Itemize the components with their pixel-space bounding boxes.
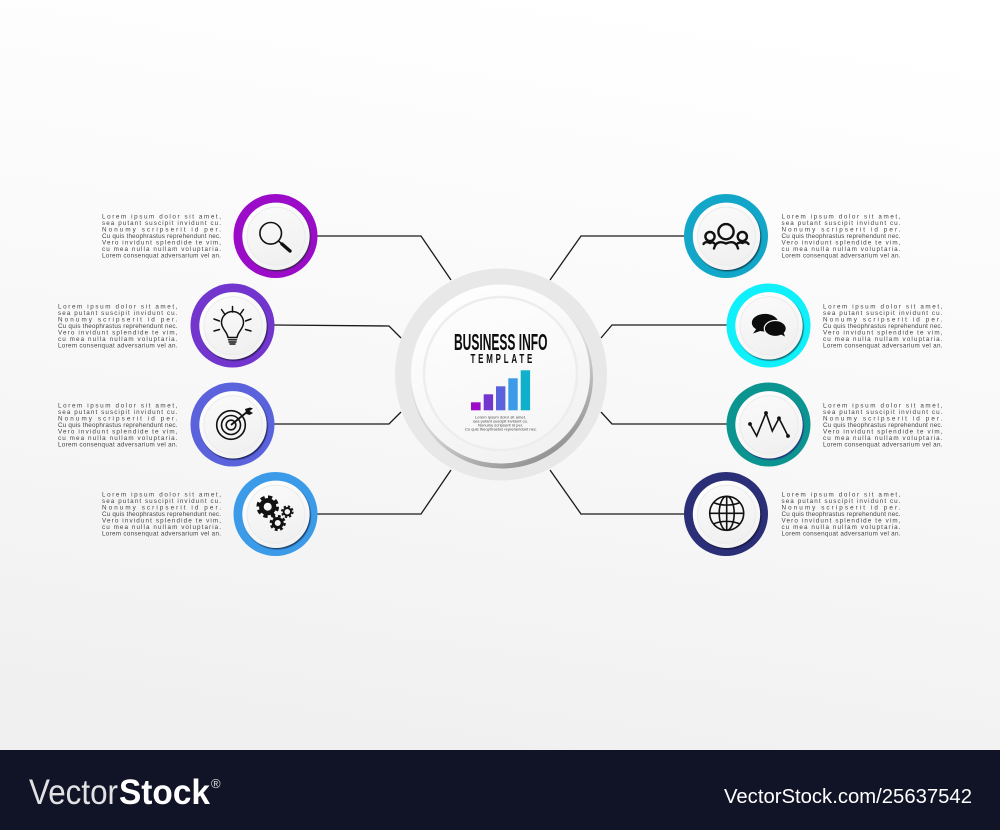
text block: left 2: Vero invidunt splendide te vim,: [58, 330, 178, 336]
node: idea: [190, 284, 274, 368]
text block: right 1: Cu quis theophrastus reprehendunt nec.: [782, 233, 901, 240]
hub title: TEMPLATE: [470, 352, 535, 367]
hub caption: [465, 415, 537, 432]
hub title: BUSINESS INFO: [454, 329, 548, 355]
text block: left 3: Cu quis theophrastus reprehendunt nec.: [58, 422, 178, 429]
footer logo: ®: [211, 776, 221, 791]
text block: right 2: Cu quis theophrastus reprehendunt nec.: [823, 323, 943, 330]
text block: right 3: Lorem consenquat adversarium vel an.: [823, 442, 943, 448]
hub caption: Nonumy scripserit id per.: [478, 422, 523, 427]
hub caption: sea putant suscipit invidunt cu.: [473, 419, 528, 424]
text block: left 1: [102, 214, 221, 260]
node: settings: [234, 472, 318, 556]
text block: left 1: Lorem consenquat adversarium vel an.: [102, 252, 221, 260]
text block: right 1: Lorem consenquat adversarium vel an.: [782, 252, 901, 260]
text block: left 3: [58, 402, 178, 448]
text block: left 4: Lorem ipsum dolor sit amet,: [102, 492, 221, 498]
text block: left 4: Cu quis theophrastus reprehendunt nec.: [102, 511, 221, 518]
text block: left 4: Vero invidunt splendide te vim,: [102, 518, 221, 524]
footer bar: [0, 750, 1000, 830]
text block: right 4: Lorem ipsum dolor sit amet,: [782, 492, 901, 498]
text block: right 3: Cu quis theophrastus reprehendunt nec.: [823, 422, 943, 429]
text block: right 3: Vero invidunt splendide te vim,: [823, 428, 943, 436]
text block: left 2: Cu quis theophrastus reprehendunt nec.: [58, 323, 178, 330]
text block: right 3: sea putant suscipit invidunt cu.: [823, 409, 943, 416]
node: search: [234, 194, 318, 278]
text block: right 2: Lorem ipsum dolor sit amet,: [823, 304, 943, 310]
text block: left 3: cu mea nulla nullam voluptaria.: [58, 435, 178, 442]
text block: left 2: cu mea nulla nullam voluptaria.: [58, 336, 178, 343]
text block: right 3: [823, 402, 943, 448]
text block: left 3: Lorem consenquat adversarium vel an.: [58, 442, 178, 448]
footer logo: Vector: [29, 773, 118, 812]
text block: left 2: [58, 304, 178, 350]
icon: magnifying glass: [260, 222, 290, 251]
text block: right 2: Nonumy scripserit id per.: [823, 316, 943, 324]
text block: left 1: cu mea nulla nullam voluptaria.: [102, 246, 221, 253]
text block: left 2: Lorem consenquat adversarium vel an.: [58, 342, 178, 350]
footer image id: VectorStock.com/25637542: [724, 786, 972, 808]
text block: right 4: sea putant suscipit invidunt cu.: [782, 498, 901, 505]
node: team: [684, 194, 768, 278]
footer logo: Stock: [119, 773, 211, 812]
text block: right 1: [782, 214, 901, 260]
text block: left 1: Cu quis theophrastus reprehendunt nec.: [102, 233, 221, 240]
text block: left 3: Vero invidunt splendide te vim,: [58, 428, 178, 436]
text block: left 3: Nonumy scripserit id per.: [58, 416, 178, 422]
text block: right 4: Vero invidunt splendide te vim,: [782, 518, 901, 524]
text block: left 1: Nonumy scripserit id per.: [102, 226, 221, 234]
text block: left 3: Lorem ipsum dolor sit amet,: [58, 402, 178, 410]
hub title: [454, 329, 548, 367]
icon: gears: [258, 497, 293, 530]
text block: right 4: cu mea nulla nullam voluptaria.: [782, 524, 901, 531]
node: globe: [684, 472, 768, 556]
text block: right 4: Lorem consenquat adversarium vel an.: [782, 530, 901, 538]
text block: left 1: Vero invidunt splendide te vim,: [102, 240, 221, 246]
footer logo: [29, 773, 221, 812]
text block: left 2: Nonumy scripserit id per.: [58, 316, 178, 324]
text block: left 2: Lorem ipsum dolor sit amet,: [58, 304, 178, 310]
text block: left 1: sea putant suscipit invidunt cu.: [102, 220, 221, 227]
text block: left 3: sea putant suscipit invidunt cu.: [58, 409, 178, 416]
icon: target with arrow: [217, 408, 253, 439]
text block: right 1: Nonumy scripserit id per.: [782, 226, 901, 234]
text block: left 4: [102, 492, 221, 538]
text block: left 2: sea putant suscipit invidunt cu.: [58, 310, 178, 317]
icon: zigzag line chart: [748, 411, 790, 438]
text block: left 4: cu mea nulla nullam voluptaria.: [102, 524, 221, 531]
text block: left 4: Lorem consenquat adversarium vel an.: [102, 530, 221, 538]
text block: right 2: sea putant suscipit invidunt cu.: [823, 310, 943, 317]
icon: people: [704, 224, 748, 248]
connector lines: [274, 236, 727, 514]
node: trend: [726, 382, 810, 466]
node: target: [190, 382, 274, 466]
text block: right 2: [823, 304, 943, 350]
text block: right 4: Cu quis theophrastus reprehendunt nec.: [782, 511, 901, 518]
text block: right 4: Nonumy scripserit id per.: [782, 504, 901, 512]
text block: right 2: cu mea nulla nullam voluptaria.: [823, 336, 943, 343]
icon: speech bubbles: [752, 314, 786, 336]
text block: right 2: Lorem consenquat adversarium vel an.: [823, 342, 943, 350]
text block: left 4: Nonumy scripserit id per.: [102, 504, 221, 512]
icon: light bulb: [214, 306, 251, 344]
text block: right 1: cu mea nulla nullam voluptaria.: [782, 246, 901, 253]
hub bar chart: [471, 370, 530, 410]
text block: right 3: Nonumy scripserit id per.: [823, 416, 943, 422]
text block: right 1: Vero invidunt splendide te vim,: [782, 240, 901, 246]
hub caption: Cu quis theophrastus reprehendunt nec.: [465, 427, 537, 432]
text block: right 1: sea putant suscipit invidunt cu.: [782, 220, 901, 227]
text block: right 3: Lorem ipsum dolor sit amet,: [823, 402, 943, 410]
central hub: [395, 268, 607, 480]
icon: globe: [710, 496, 744, 530]
node: chat: [726, 284, 810, 368]
text block: left 1: Lorem ipsum dolor sit amet,: [102, 214, 221, 220]
text block: right 1: Lorem ipsum dolor sit amet,: [782, 214, 901, 220]
text block: right 2: Vero invidunt splendide te vim,: [823, 330, 943, 336]
text block: right 4: [782, 492, 901, 538]
text block: right 3: cu mea nulla nullam voluptaria.: [823, 435, 943, 442]
text block: left 4: sea putant suscipit invidunt cu.: [102, 498, 221, 505]
hub caption: Lorem ipsum dolor sit amet,: [475, 415, 526, 420]
